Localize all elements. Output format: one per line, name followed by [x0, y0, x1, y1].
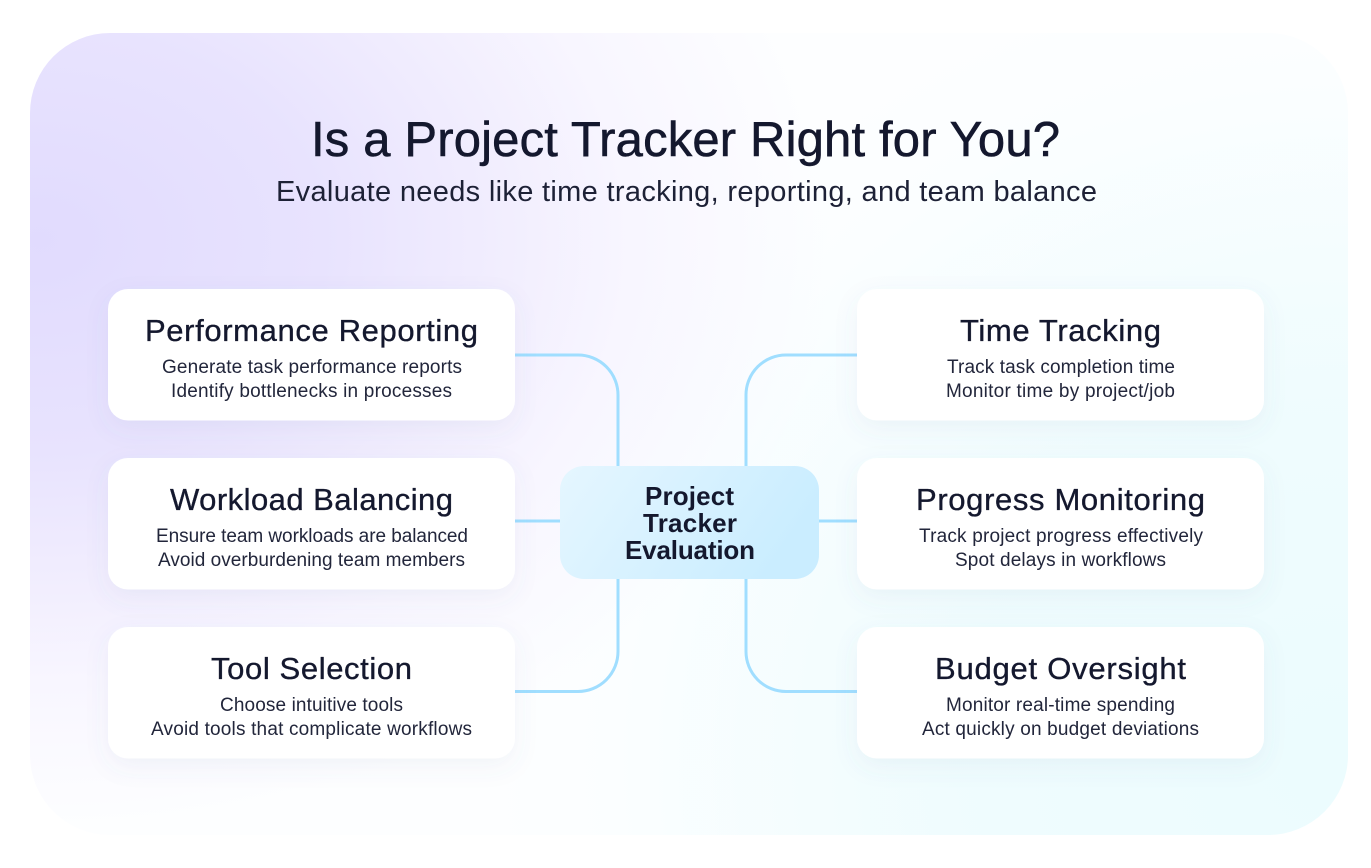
card: Workload Balancing: Avoid overburdening team members: [158, 550, 465, 571]
card: Progress Monitoring: Track project progress effectively: [919, 526, 1204, 547]
card: Budget Oversight: Act quickly on budget deviations: [922, 719, 1199, 740]
card: Workload Balancing: Ensure team workloads are balanced: [156, 526, 468, 547]
card: Performance Reporting: [108, 289, 515, 420]
card: Budget Oversight: [857, 627, 1264, 758]
card: Tool Selection: Choose intuitive tools: [220, 695, 403, 716]
card: Performance Reporting: Generate task performance reports: [162, 357, 462, 378]
central node: Project Tracker Evaluation: Tracker: [643, 508, 737, 538]
card: Time Tracking: Monitor time by project/job: [946, 381, 1175, 402]
central node: Project Tracker Evaluation: Evaluation: [625, 535, 755, 565]
subtitle: Evaluate needs like time tracking, reporting, and team balance: [276, 176, 1097, 208]
card: Tool Selection: Avoid tools that complicate workflows: [151, 719, 472, 740]
title: Is a Project Tracker Right for You?: [311, 113, 1060, 167]
card: Time Tracking: Time Tracking: [960, 313, 1161, 348]
central node: Project Tracker Evaluation: [560, 466, 819, 579]
card: Workload Balancing: [108, 458, 515, 590]
connector lines: [515, 355, 857, 692]
card: Workload Balancing: Workload Balancing: [170, 482, 453, 517]
card: Progress Monitoring: Spot delays in workflows: [955, 550, 1166, 571]
card: Performance Reporting: Identify bottlenecks in processes: [171, 381, 452, 402]
card: Tool Selection: Tool Selection: [211, 651, 412, 686]
card: Budget Oversight: Budget Oversight: [935, 651, 1186, 686]
card: Progress Monitoring: [857, 458, 1264, 590]
central node: Project Tracker Evaluation: Project: [645, 481, 734, 511]
card: Budget Oversight: Monitor real-time spending: [946, 695, 1175, 716]
card: Performance Reporting: Performance Reporting: [145, 313, 478, 348]
card: Tool Selection: [108, 627, 515, 758]
card: Progress Monitoring: Progress Monitoring: [916, 482, 1205, 517]
card: Time Tracking: [857, 289, 1264, 420]
card: Time Tracking: Track task completion time: [947, 357, 1175, 378]
